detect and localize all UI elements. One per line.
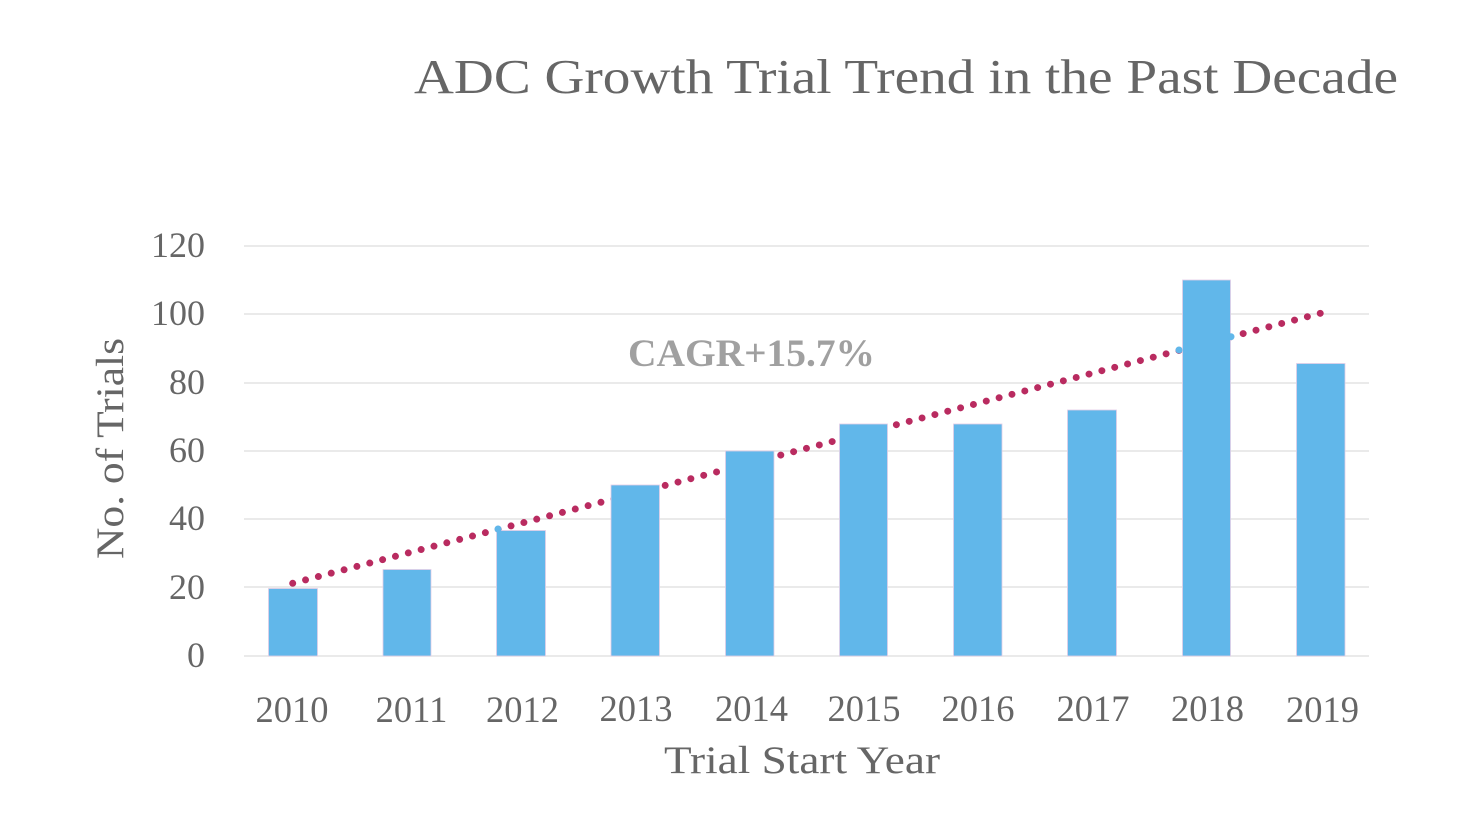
x-axis tick labels: 2014 <box>715 688 788 729</box>
x-axis tick labels: 2010 <box>256 689 328 730</box>
x-axis tick labels: 2015 <box>828 688 900 729</box>
x-axis title: Trial Start Year <box>664 739 940 782</box>
y-axis tick labels: 0 <box>187 635 205 675</box>
x-axis tick labels: 2013 <box>600 688 672 729</box>
CAGR annotation: CAGR+15.7% <box>628 332 875 375</box>
x-axis tick labels <box>256 688 1359 730</box>
y-axis tick labels: 120 <box>151 225 205 265</box>
x-axis tick labels: 2011 <box>376 689 447 730</box>
y-axis tick labels: 100 <box>151 293 205 333</box>
x-axis tick labels: 2017 <box>1056 688 1130 729</box>
y-axis title: No. of Trials <box>89 338 132 559</box>
bars <box>268 280 1345 656</box>
y-axis tick labels: 40 <box>169 498 205 538</box>
x-axis tick labels: 2016 <box>942 688 1014 729</box>
title: ADC Growth Trial Trend in the Past Decade <box>414 49 1398 104</box>
y-axis tick labels: 20 <box>169 567 205 607</box>
x-axis tick labels: 2019 <box>1286 689 1359 730</box>
y-axis tick labels: 60 <box>169 430 205 470</box>
trend line <box>293 313 1322 583</box>
x-axis tick labels: 2018 <box>1171 688 1244 729</box>
y-axis tick labels: 80 <box>169 362 205 402</box>
trend line markers in blue <box>494 333 1234 532</box>
y-axis tick labels <box>151 225 205 675</box>
x-axis tick labels: 2012 <box>486 689 559 730</box>
